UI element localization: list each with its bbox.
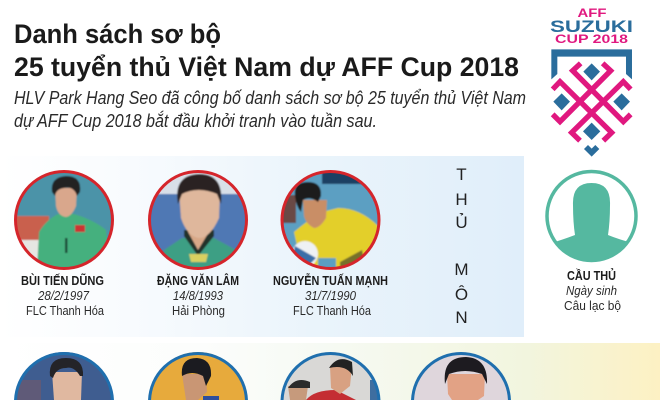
player card: Đặng Văn Lâm: ĐẶNG VĂN LÂM — [157, 273, 239, 288]
label: Thủ Môn vertical: M — [454, 260, 469, 279]
label: Thủ Môn vertical — [454, 165, 469, 327]
label: Thủ Môn vertical: T — [456, 165, 467, 184]
photo: defender 4 — [411, 352, 513, 400]
label: Thủ Môn vertical: Ủ — [455, 213, 468, 232]
logo: AFF Suzuki Cup 2018 — [550, 8, 633, 157]
photo: defender 3 — [280, 352, 382, 400]
label: Thủ Môn vertical: N — [455, 308, 468, 327]
panel: defenders background — [0, 343, 660, 400]
player card: Bùi Tiến Dũng: BÙI TIẾN DŨNG — [21, 273, 104, 288]
player card: Nguyễn Tuấn Mạnh: NGUYỄN TUẤN MẠNH — [273, 273, 388, 288]
player card: Đặng Văn Lâm: 14/8/1993 — [173, 288, 224, 303]
subtitle: HLV Park Hang Seo đã công bố danh sách sơ bộ 25 tuyển thủ Việt Nam — [14, 88, 526, 108]
panel: goalkeepers background — [0, 156, 524, 337]
player card: Nguyễn Tuấn Mạnh: 31/7/1990 — [305, 288, 357, 303]
player card: placeholder legend: Câu lạc bộ — [564, 298, 621, 313]
player card: Đặng Văn Lâm: Hải Phòng — [172, 303, 225, 318]
label: Thủ Môn vertical: Ô — [455, 285, 468, 304]
player card: Đặng Văn Lâm — [148, 170, 250, 318]
icon: player silhouette — [545, 172, 640, 270]
player card: placeholder legend: Ngày sinh — [566, 283, 617, 298]
subtitle: dự AFF Cup 2018 bắt đầu khởi tranh vào tuần sau. — [14, 111, 377, 131]
logo: AFF Suzuki Cup 2018: AFF — [578, 8, 606, 20]
photo: Nguyễn Tuấn Mạnh — [280, 170, 382, 270]
photo: Bùi Tiến Dũng — [13, 170, 115, 272]
subtitle — [14, 88, 526, 131]
player card: Bùi Tiến Dũng — [13, 170, 115, 318]
player card: Nguyễn Tuấn Mạnh — [273, 170, 388, 318]
photo: Đặng Văn Lâm — [148, 170, 250, 270]
photo: defender 2 — [148, 352, 250, 400]
player card: Nguyễn Tuấn Mạnh: FLC Thanh Hóa — [293, 303, 372, 318]
logo: AFF Suzuki Cup 2018: SUZUKI — [550, 17, 633, 36]
player card: placeholder legend: CẦU THỦ — [567, 268, 616, 283]
player card: placeholder legend — [545, 172, 640, 313]
player card: Bùi Tiến Dũng: 28/2/1997 — [37, 288, 90, 303]
title: Danh sách sơ bộ — [14, 19, 221, 49]
photo: defender 1 — [13, 352, 115, 400]
title: 25 tuyển thủ Việt Nam dự AFF Cup 2018 — [14, 52, 519, 82]
title — [14, 19, 519, 82]
label: Thủ Môn vertical: H — [455, 190, 468, 209]
player card: Bùi Tiến Dũng: FLC Thanh Hóa — [26, 303, 105, 318]
logo: AFF Suzuki Cup 2018: CUP 2018 — [555, 34, 629, 46]
